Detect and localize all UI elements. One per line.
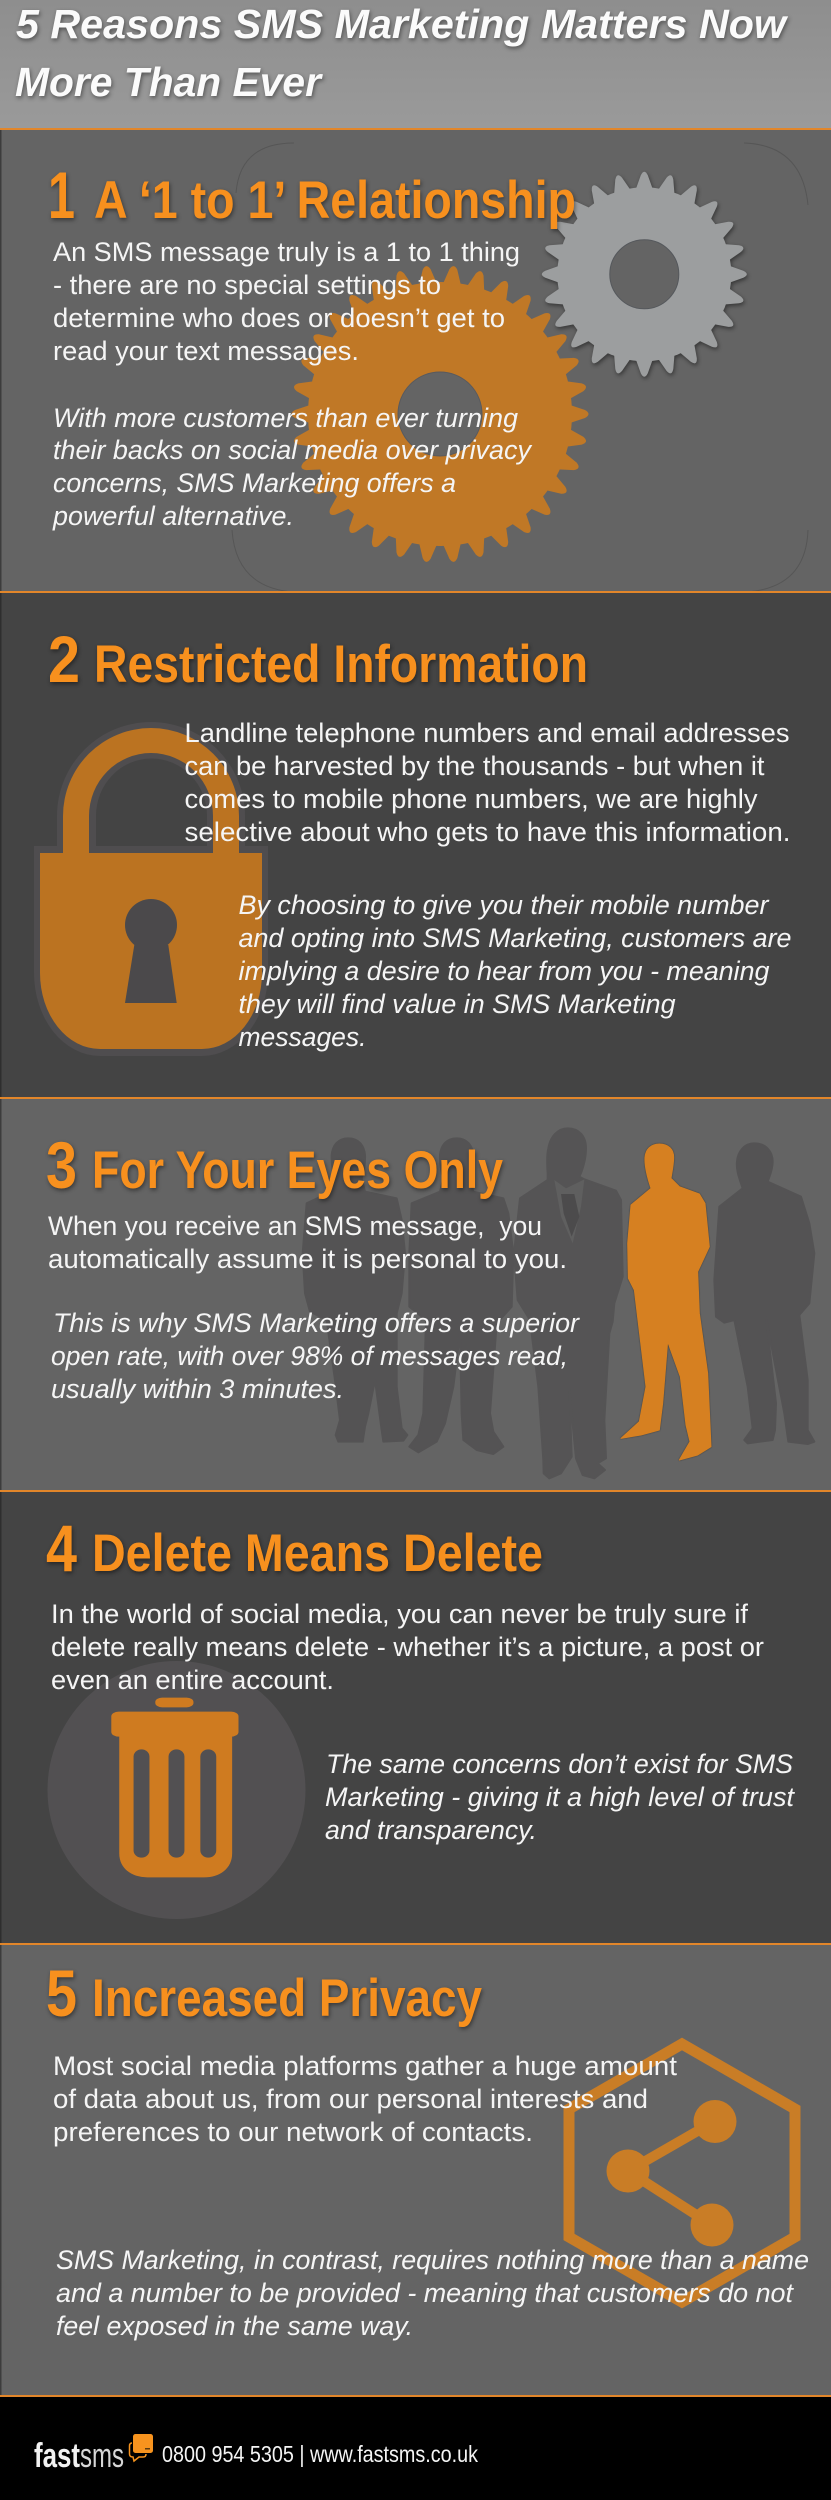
icon: highlighted orange silhouette: [621, 1144, 711, 1460]
text block: italic 5: SMS Marketing, in contrast, requires nothing more than a name: [56, 2245, 809, 2275]
heading 5: [46, 1956, 482, 2030]
heading 1: A ‘1 to 1’ Relationship: [94, 171, 576, 230]
icon: share hexagon: [569, 2044, 795, 2302]
text block: italic 2: [238, 890, 792, 1052]
heading 2: 2: [48, 622, 80, 696]
text block: body 4: even an entire account.: [51, 1665, 334, 1695]
text block: italic 4: Marketing - giving it a high level of trust: [325, 1782, 795, 1812]
icon: circle background: [48, 1661, 306, 1919]
text block: body 2: can be harvested by the thousands - but when it: [184, 751, 765, 781]
heading 3: For Your Eyes Only: [92, 1141, 503, 1200]
text block: italic 2: By choosing to give you their mobile number: [238, 890, 769, 920]
text block: body 2: selective about who gets to have this information.: [184, 817, 790, 847]
text block: body 3: [48, 1211, 567, 1274]
text block: body 1: read your text messages.: [53, 336, 359, 366]
icon: grey gear: [542, 172, 747, 377]
text block: body 4: In the world of social media, you can never be truly sure if: [51, 1599, 749, 1629]
text block: body 2: Landline telephone numbers and email addresses: [184, 718, 790, 748]
icon: two background silhouettes: [303, 1138, 513, 1454]
panel: 2 Restricted Information: [0, 592, 831, 1098]
panel: 5 Increased Privacy: [0, 1944, 831, 2396]
logo wordmark: fast: [34, 2437, 80, 2475]
text block: body 1: [53, 237, 520, 366]
text block: body 5: [53, 2051, 677, 2147]
text block: body 1: determine who does or doesn’t get to: [53, 303, 505, 333]
text block: italic 3: open rate, with over 98% of messages read,: [51, 1341, 568, 1371]
text block: body 1: - there are no special settings to: [53, 270, 441, 300]
text block: body 2: [184, 718, 790, 847]
text block: italic 3: [51, 1308, 580, 1404]
heading 2: Restricted Information: [94, 635, 588, 694]
text block: body 5: Most social media platforms gather a huge amount: [53, 2051, 677, 2081]
text block: italic 2: messages.: [238, 1022, 366, 1052]
text block: body 4: [51, 1599, 764, 1695]
text block: italic 4: [325, 1749, 795, 1845]
heading 1: [48, 158, 576, 232]
icon: front silhouettes: [514, 1128, 814, 1478]
panel: 4 Delete Means Delete: [0, 1491, 831, 1944]
title: More Than Ever: [15, 59, 323, 105]
text block: italic 2: and opting into SMS Marketing, customers are: [238, 923, 792, 953]
heading 4: Delete Means Delete: [92, 1524, 543, 1583]
text block: italic 1: concerns, SMS Marketing offers a: [53, 468, 456, 498]
text block: italic 1: [52, 403, 532, 531]
text block: italic 2: they will find value in SMS Marketing: [238, 989, 676, 1019]
text block: body 5: of data about us, from our personal interests and: [53, 2084, 648, 2114]
title: [15, 1, 789, 105]
text block: italic 1: powerful alternative.: [52, 501, 294, 531]
logo wordmark: [34, 2437, 124, 2475]
text block: body 4: delete really means delete - whether it’s a picture, a post or: [51, 1632, 764, 1662]
icon: orange gear: [292, 265, 588, 563]
text block: body 3: automatically assume it is personal to you.: [48, 1244, 567, 1274]
icon: speech bubbles: [130, 2434, 153, 2461]
text block: italic 5: feel exposed in the same way.: [56, 2311, 413, 2341]
logo wordmark: sms: [80, 2437, 124, 2475]
heading 3: 3: [46, 1128, 77, 1202]
text block: italic 5: [56, 2245, 809, 2341]
icon: trash bin: [111, 1698, 238, 1877]
text block: italic 4: and transparency.: [325, 1815, 537, 1845]
heading 2: [48, 622, 588, 696]
text block: italic 5: and a number to be provided - meaning that customers do not: [56, 2278, 794, 2308]
text block: italic 2: implying a desire to hear from you - meaning: [238, 956, 770, 986]
text block: italic 4: The same concerns don’t exist for SMS: [326, 1749, 793, 1779]
text block: body 3: When you receive an SMS message, you: [48, 1211, 542, 1241]
contact details: 0800 954 5305 | www.fastsms.co.uk: [162, 2441, 478, 2467]
text block: italic 1: With more customers than ever turning: [53, 403, 518, 433]
panel: 1 A '1 to 1' Relationship: [0, 129, 831, 592]
heading 5: Increased Privacy: [92, 1969, 482, 2028]
header panel: [0, 0, 831, 129]
heading 3: [46, 1128, 503, 1202]
heading 1: 1: [48, 158, 75, 232]
heading 4: 4: [46, 1511, 77, 1585]
title: 5 Reasons SMS Marketing Matters Now: [16, 1, 789, 47]
text block: body 5: preferences to our network of contacts.: [53, 2117, 533, 2147]
footer panel: [0, 2396, 831, 2500]
text block: italic 3: This is why SMS Marketing offers a superior: [53, 1308, 580, 1338]
text block: body 2: comes to mobile phone numbers, we are highly: [184, 784, 758, 814]
heading 5: 5: [46, 1956, 77, 2030]
heading 4: [46, 1511, 543, 1585]
text block: body 1: An SMS message truly is a 1 to 1 thing: [53, 237, 520, 267]
text block: italic 1: their backs on social media over privacy: [53, 435, 532, 465]
text block: italic 3: usually within 3 minutes.: [51, 1374, 344, 1404]
icon: padlock: [34, 722, 268, 1056]
panel: 3 For Your Eyes Only: [0, 1098, 831, 1491]
